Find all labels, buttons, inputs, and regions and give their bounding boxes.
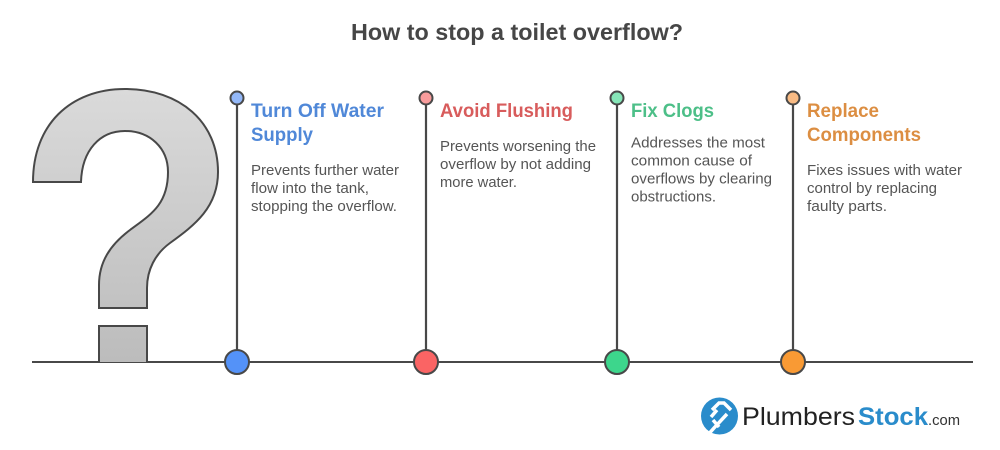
panel: turn off water supply: Prevents further water bbox=[251, 163, 399, 179]
panel: replace components: Components bbox=[807, 125, 921, 146]
logo: PlumbersStock bbox=[701, 398, 960, 437]
panel: avoid flushing: more water. bbox=[440, 175, 517, 191]
panel: turn off water supply: Supply bbox=[251, 125, 313, 146]
panel: fix clogs: overflows by clearing bbox=[631, 172, 772, 188]
panel: turn off water supply: stopping the overflow. bbox=[251, 199, 397, 215]
panel: replace components bbox=[781, 92, 962, 374]
panel: avoid flushing bbox=[414, 92, 596, 374]
panel: turn off water supply bbox=[225, 92, 399, 374]
panel: replace components: Replace bbox=[807, 101, 879, 122]
icon: question mark bbox=[33, 89, 218, 362]
title: How to stop a toilet overflow? bbox=[351, 19, 683, 45]
panel: avoid flushing: Prevents worsening the bbox=[440, 139, 596, 155]
panel: replace components: control by replacing bbox=[807, 181, 937, 197]
logo: PlumbersStock: .com bbox=[928, 413, 960, 429]
panel: fix clogs: Addresses the most bbox=[631, 136, 765, 152]
panel: turn off water supply: flow into the tank, bbox=[251, 181, 369, 197]
panel: fix clogs: Fix Clogs bbox=[631, 101, 714, 122]
panel: fix clogs: obstructions. bbox=[631, 190, 716, 206]
panel: turn off water supply: Turn Off Water bbox=[251, 101, 385, 122]
baseline timeline bbox=[32, 361, 973, 363]
panel: avoid flushing: Avoid Flushing bbox=[440, 101, 573, 122]
panel: fix clogs: common cause of bbox=[631, 154, 753, 170]
logo: PlumbersStock: Plumbers bbox=[742, 403, 855, 431]
panel: fix clogs bbox=[605, 92, 772, 374]
panel: avoid flushing: overflow by not adding bbox=[440, 157, 591, 173]
logo: PlumbersStock: Stock bbox=[858, 403, 928, 431]
panel: replace components: Fixes issues with water bbox=[807, 163, 962, 179]
panel: replace components: faulty parts. bbox=[807, 199, 887, 215]
